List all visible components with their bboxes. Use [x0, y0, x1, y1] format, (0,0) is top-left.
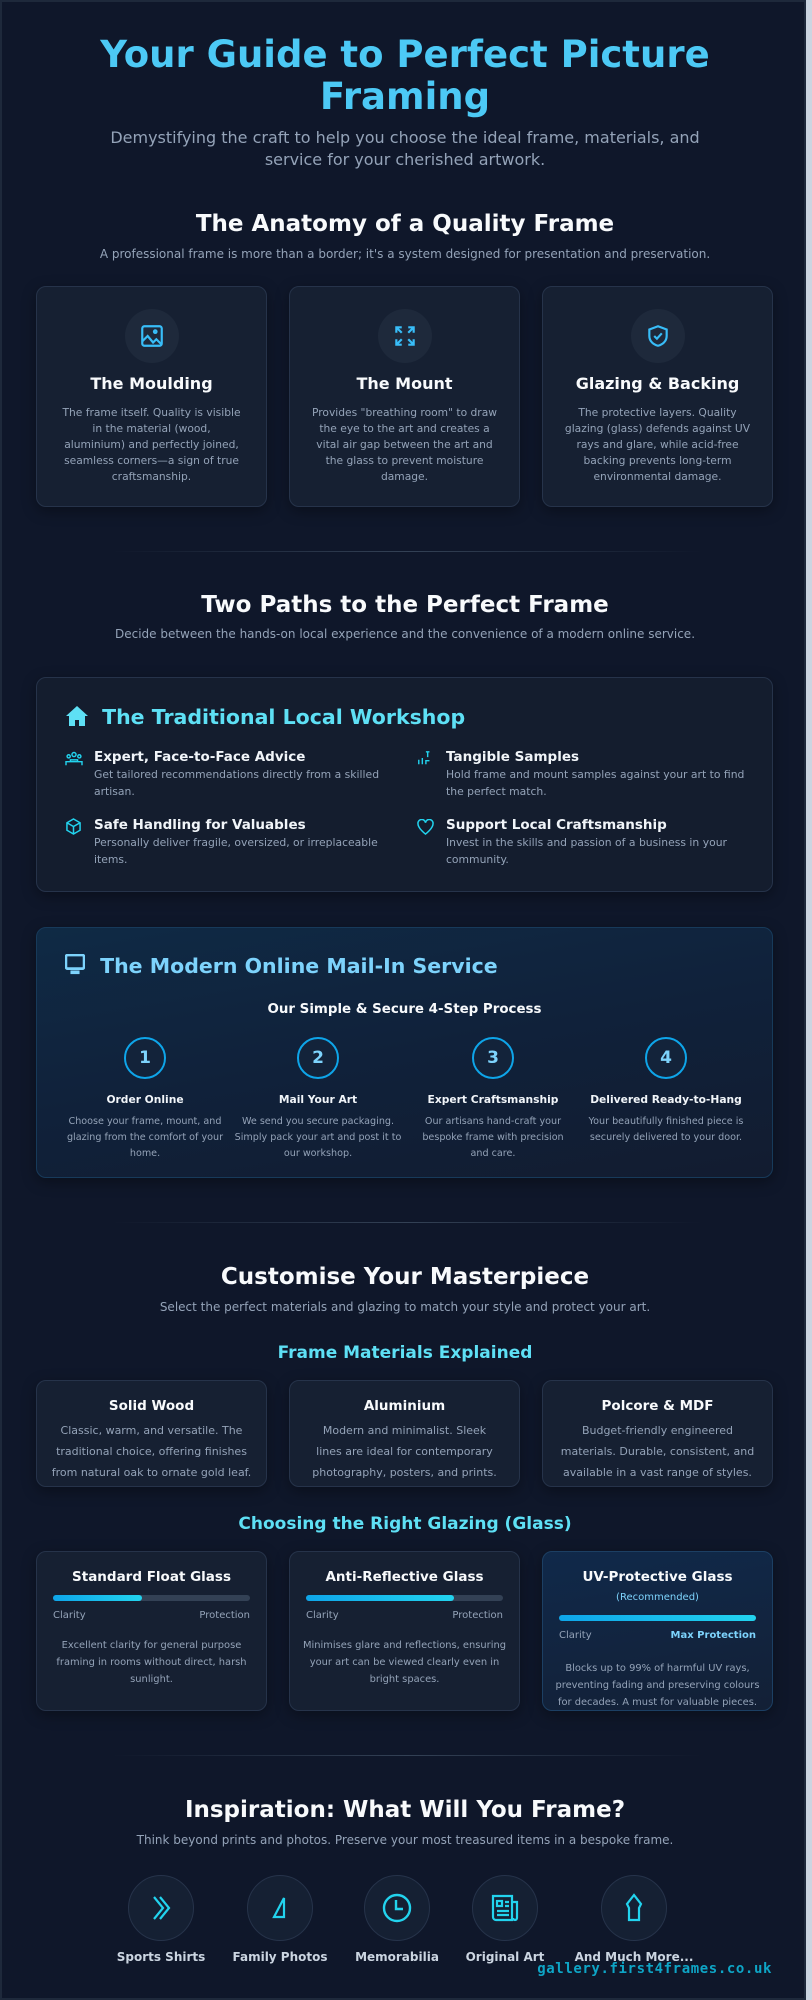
heading: inspiration: Inspiration: What Will You Frame?	[185, 1797, 625, 1823]
panel: solid wood: Solid Wood	[109, 1398, 194, 1414]
anatomy subtitle: A professional frame is more than a border; it's a system designed for presentation and preservation.	[100, 247, 710, 261]
title	[100, 33, 710, 118]
panel: online mail-in service	[36, 927, 773, 1178]
heading: anatomy: The Anatomy of a Quality Frame	[196, 211, 614, 237]
item: tangible samples: Hold frame and mount samples against your art to find the perfect match.	[446, 768, 744, 798]
bar	[559, 1615, 756, 1621]
card text: Provides "breathing room" to draw the eye to the art and creates a vital air gap between the art and the glass to prevent moisture damage.	[312, 406, 497, 483]
subheading: materials: Frame Materials Explained	[278, 1343, 532, 1363]
panel: standard float glass: Standard Float Glass	[72, 1569, 231, 1585]
icon: people	[65, 752, 83, 766]
panel: aluminium: Aluminium	[364, 1398, 445, 1414]
item: tangible samples: Tangible Samples	[446, 749, 579, 765]
card text: The frame itself. Quality is visible in the material (wood, aluminium) and perfectly joined, seamless corners—a sign of true craftsmanship.	[62, 406, 241, 483]
heading with house icon: The Traditional Local Workshop	[102, 705, 465, 729]
item: support local: Support Local Craftsmanship	[446, 817, 667, 833]
icon: heart	[417, 819, 434, 835]
panel: uv-protective glass: UV-Protective Glass	[582, 1569, 733, 1585]
process heading: Our Simple & Secure 4-Step Process	[268, 1002, 542, 1017]
panel: aluminium	[289, 1380, 520, 1487]
step 1: Order Online	[106, 1093, 184, 1106]
panel: mount	[289, 286, 520, 507]
icon: expand	[378, 309, 432, 363]
panel: anti-reflective glass: Protection	[452, 1610, 503, 1621]
item: safe handling	[66, 817, 378, 866]
step 2: We send you secure packaging. Simply pack your art and post it to our workshop.	[235, 1116, 401, 1159]
panel: anti-reflective glass: Anti-Reflective Glass	[325, 1569, 484, 1585]
panel: anti-reflective glass	[289, 1551, 520, 1711]
item: expert advice	[65, 749, 379, 798]
icon: samples	[418, 751, 430, 764]
icon: shield	[631, 309, 685, 363]
item: expert advice: Expert, Face-to-Face Advice	[94, 749, 305, 765]
step 2: Mail Your Art	[279, 1093, 357, 1106]
customise subtitle: Select the perfect materials and glazing to match your style and protect your art.	[160, 1300, 650, 1314]
step 1: 1	[139, 1048, 151, 1068]
panel: standard float glass: Clarity	[53, 1610, 86, 1621]
item: support local	[417, 817, 727, 866]
heading: two paths: Two Paths to the Perfect Frame	[201, 592, 609, 618]
icon: memorabilia	[355, 1875, 439, 1964]
subtitle: Demystifying the craft to help you choose the ideal frame, materials, and	[110, 128, 700, 147]
panel: uv-protective glass: Blocks up to 99% of harmful UV rays, preventing fading and preserving colours for decades. A must for valuable pieces.	[555, 1663, 760, 1708]
panel: aluminium: Modern and minimalist. Sleek lines are ideal for contemporary photography, posters, and prints.	[312, 1424, 497, 1479]
bar	[306, 1595, 503, 1601]
step 2	[235, 1037, 401, 1159]
icon: box	[66, 818, 81, 835]
step 1: Choose your frame, mount, and glazing from the comfort of your home.	[67, 1116, 223, 1159]
inspiration subtitle: Think beyond prints and photos. Preserve your most treasured items in a bespoke frame.	[137, 1833, 673, 1847]
icon: original art: Original Art	[466, 1950, 544, 1964]
panel: polcore & mdf	[542, 1380, 773, 1487]
item: safe handling: Safe Handling for Valuables	[94, 817, 306, 833]
card title: Glazing & Backing	[576, 374, 739, 393]
panel: solid wood: Classic, warm, and versatile. The traditional choice, offering finishes from natural oak to ornate gold leaf.	[52, 1424, 251, 1479]
icon: sports shirts: Sports Shirts	[117, 1950, 205, 1964]
icon: original art	[466, 1875, 544, 1964]
panel: local workshop	[36, 677, 773, 892]
panel: standard float glass: Excellent clarity for general purpose framing in rooms without direct, harsh sunlight.	[56, 1640, 247, 1685]
item: support local: Invest in the skills and passion of a business in your community.	[446, 836, 727, 866]
title: Your Guide to Perfect Picture	[100, 33, 710, 76]
icon: and much more	[574, 1875, 693, 1964]
step 3: Expert Craftsmanship	[428, 1093, 558, 1106]
panel: standard float glass	[36, 1551, 267, 1711]
panel: polcore & mdf: Budget-friendly engineered materials. Durable, consistent, and available in a vast range of styles.	[561, 1424, 754, 1479]
step 4: 4	[660, 1048, 672, 1068]
bar	[53, 1595, 250, 1601]
item: safe handling: Personally deliver fragile, oversized, or irreplaceable items.	[94, 836, 378, 866]
panel: uv-protective glass: Max Protection	[671, 1630, 756, 1641]
step 1	[67, 1037, 224, 1159]
two paths subtitle: Decide between the hands-on local experience and the convenience of a modern online service.	[115, 627, 695, 641]
card text: The protective layers. Quality glazing (glass) defends against UV rays and glare, while acid-free backing prevents long-term environmental damage.	[565, 406, 750, 483]
icon: family photos: Family Photos	[232, 1950, 328, 1964]
panel: standard float glass: Protection	[199, 1610, 250, 1621]
subtitle: service for your cherished artwork.	[265, 150, 545, 169]
step 3	[422, 1037, 564, 1159]
panel: moulding	[36, 286, 267, 507]
panel: uv-protective glass: (Recommended)	[616, 1592, 699, 1603]
step 3: 3	[487, 1048, 499, 1068]
subtitle	[110, 128, 700, 169]
card title: The Mount	[356, 374, 453, 393]
icon: family photos	[232, 1875, 328, 1964]
icon: memorabilia: Memorabilia	[355, 1950, 439, 1964]
title: Framing	[320, 75, 490, 118]
heading with monitor icon: The Modern Online Mail-In Service	[100, 954, 498, 978]
step 4: Your beautifully finished piece is securely delivered to your door.	[589, 1116, 743, 1143]
step 4	[588, 1037, 743, 1143]
panel: anti-reflective glass: Clarity	[306, 1610, 339, 1621]
card title: The Moulding	[90, 374, 213, 393]
step 4: Delivered Ready-to-Hang	[590, 1093, 742, 1106]
panel: uv-protective glass: Clarity	[559, 1630, 592, 1641]
panel: polcore & mdf: Polcore & MDF	[602, 1398, 713, 1414]
item: tangible samples	[418, 749, 744, 798]
watermark: gallery.first4frames.co.uk	[537, 1961, 772, 1977]
icon: sports shirts	[117, 1875, 205, 1964]
item: expert advice: Get tailored recommendations directly from a skilled artisan.	[94, 768, 379, 798]
step 3: Our artisans hand-craft your bespoke frame with precision and care.	[422, 1116, 564, 1159]
subheading: glazing: Choosing the Right Glazing (Glass)	[238, 1514, 572, 1534]
panel: anti-reflective glass: Minimises glare and reflections, ensuring your art can be viewed clearly even in bright spaces.	[303, 1640, 506, 1685]
icon: and much more: And Much More...	[575, 1950, 693, 1964]
icon: picture	[125, 309, 179, 363]
panel: uv-protective glass	[542, 1551, 773, 1711]
panel: solid wood	[36, 1380, 267, 1487]
heading: customise: Customise Your Masterpiece	[221, 1264, 589, 1290]
step 2: 2	[312, 1048, 324, 1068]
panel: glazing & backing	[542, 286, 773, 507]
